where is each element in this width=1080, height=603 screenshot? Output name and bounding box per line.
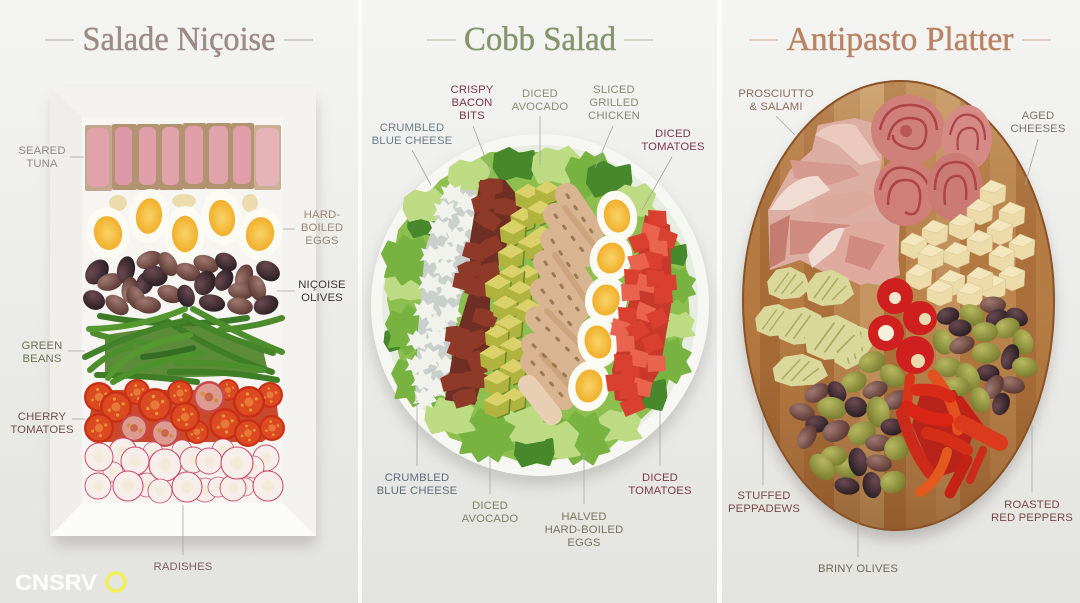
label: hard-boiled eggs: BOILED: [301, 222, 343, 234]
label: radishes: RADISHES: [154, 561, 213, 573]
label: crumbled blue cheese (top): CRUMBLED: [380, 122, 444, 134]
label: sliced grilled chicken: [588, 84, 640, 168]
seared tuna slices: [85, 123, 281, 191]
label: hard-boiled eggs: [283, 209, 343, 247]
label: seared tuna: TUNA: [26, 158, 58, 170]
label: diced tomatoes (bottom): [628, 410, 692, 497]
label: briny olives: BRINY OLIVES: [818, 563, 898, 575]
label: diced tomatoes (top): DICED: [655, 128, 691, 140]
panel: Salade Nicoise: [0, 0, 358, 603]
label: roasted red peppers: ROASTED: [1004, 499, 1060, 511]
label: halved hard-boiled eggs: EGGS: [567, 537, 601, 549]
crumbled blue cheese: [405, 183, 480, 408]
label: prosciutto and salami: PROSCIUTTO: [738, 88, 814, 100]
label: sliced grilled chicken: CHICKEN: [588, 110, 640, 122]
label: nicoise olives: OLIVES: [301, 292, 343, 304]
panel: Cobb Salad: [362, 0, 717, 603]
crispy bacon bits: [440, 177, 525, 409]
title: Antipasto Platter: Antipasto Platter: [786, 21, 1014, 58]
sliced grilled chicken: [528, 195, 596, 415]
label: cherry tomatoes: [10, 411, 85, 436]
title: Cobb Salad: Cobb Salad: [464, 21, 616, 58]
label: halved hard-boiled eggs: [545, 453, 623, 549]
label: seared tuna: [18, 145, 84, 170]
label: green beans: BEANS: [22, 353, 62, 365]
label: aged cheeses: [1010, 110, 1066, 185]
label: crumbled blue cheese (bottom): BLUE CHEESE: [377, 485, 458, 497]
label: nicoise olives: NIÇOISE: [298, 279, 346, 291]
label: crispy bacon bits: BITS: [459, 110, 485, 122]
label: aged cheeses: CHEESES: [1010, 123, 1066, 135]
nicoise olives: [79, 248, 284, 319]
label: roasted red peppers: [991, 425, 1073, 524]
label: sliced grilled chicken: GRILLED: [589, 97, 639, 109]
label: stuffed peppadews: PEPPADEWS: [728, 503, 800, 515]
label: crumbled blue cheese (top): [372, 122, 453, 185]
label: diced avocado (top): AVOCADO: [512, 101, 568, 113]
label: prosciutto and salami: [738, 88, 814, 135]
logo: CNSRV watermark: [15, 570, 125, 595]
label: sliced grilled chicken: SLICED: [593, 84, 635, 96]
label: crispy bacon bits: BACON: [452, 97, 492, 109]
label: green beans: [22, 340, 85, 365]
label: cherry tomatoes: CHERRY: [18, 411, 67, 423]
logo: CNSRV watermark: CNSRV: [15, 570, 97, 595]
label: diced avocado (bottom): DICED: [472, 500, 508, 512]
label: prosciutto and salami: & SALAMI: [749, 101, 803, 113]
title: Salade Nicoise: Salade Niçoise: [82, 21, 276, 58]
roasted red peppers: [902, 375, 1000, 493]
label: diced avocado (bottom): AVOCADO: [462, 513, 518, 525]
salami roses: [871, 95, 992, 226]
label: crumbled blue cheese (top): BLUE CHEESE: [372, 135, 453, 147]
label: diced avocado (top): DICED: [522, 88, 558, 100]
label: diced tomatoes (top): TOMATOES: [641, 141, 705, 153]
label: roasted red peppers: RED PEPPERS: [991, 512, 1073, 524]
rectangular white plate: [50, 87, 316, 546]
diced avocado: [480, 181, 559, 418]
prosciutto: [768, 118, 900, 285]
label: crispy bacon bits: CRISPY: [451, 84, 494, 96]
green beans: [85, 309, 282, 382]
label: briny olives: [818, 522, 898, 575]
round plate: [370, 134, 710, 486]
label: crispy bacon bits: [451, 84, 494, 178]
label: green beans: GREEN: [22, 340, 62, 352]
label: stuffed peppadews: STUFFED: [737, 490, 791, 502]
label: crumbled blue cheese (bottom): CRUMBLED: [385, 472, 449, 484]
wooden board: [740, 78, 1060, 540]
radishes: [85, 438, 283, 503]
stuffed peppadews: [868, 278, 937, 374]
label: stuffed peppadews: [728, 415, 800, 515]
label: hard-boiled eggs: HARD-: [304, 209, 340, 221]
label: diced tomatoes (bottom): TOMATOES: [628, 485, 692, 497]
label: nicoise olives: [277, 279, 346, 304]
label: cherry tomatoes: TOMATOES: [10, 424, 74, 436]
label: aged cheeses: AGED: [1022, 110, 1054, 122]
cherry tomatoes: [84, 379, 285, 447]
label: seared tuna: SEARED: [18, 145, 66, 157]
label: hard-boiled eggs: EGGS: [305, 235, 339, 247]
hard-boiled eggs: [81, 186, 287, 264]
diced tomatoes: [605, 210, 679, 417]
label: diced avocado (bottom): [462, 455, 518, 525]
panel: Antipasto Platter: [722, 0, 1080, 603]
aged cheeses: [901, 180, 1035, 308]
label: diced tomatoes (bottom): DICED: [642, 472, 678, 484]
label: radishes: [154, 505, 213, 573]
briny olives: [787, 296, 1040, 500]
label: diced tomatoes (top): [641, 128, 705, 210]
label: crumbled blue cheese (bottom): [377, 400, 458, 497]
label: diced avocado (top): [512, 88, 568, 165]
label: halved hard-boiled eggs: HALVED: [561, 511, 607, 523]
label: halved hard-boiled eggs: HARD-BOILED: [545, 524, 623, 536]
romaine lettuce: [382, 147, 695, 466]
halved hard-boiled eggs: [564, 187, 642, 415]
artichoke hearts: [755, 267, 881, 386]
